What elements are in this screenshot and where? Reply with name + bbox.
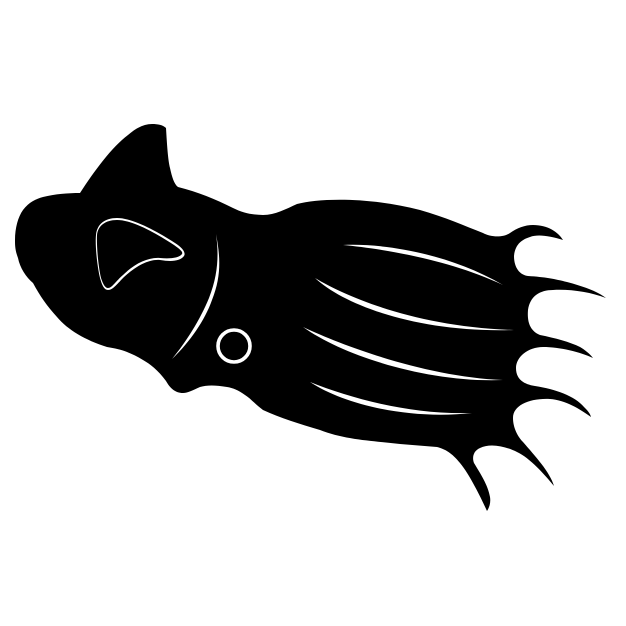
siphon ring: [218, 330, 250, 362]
body stripe 1: [343, 245, 503, 285]
body stripe 3: [303, 327, 503, 380]
body stripe 2: [315, 278, 514, 330]
body stripe 4: [310, 382, 472, 415]
body silhouette: [15, 124, 606, 511]
eye outline: [96, 218, 185, 290]
head divider line: [172, 234, 219, 359]
